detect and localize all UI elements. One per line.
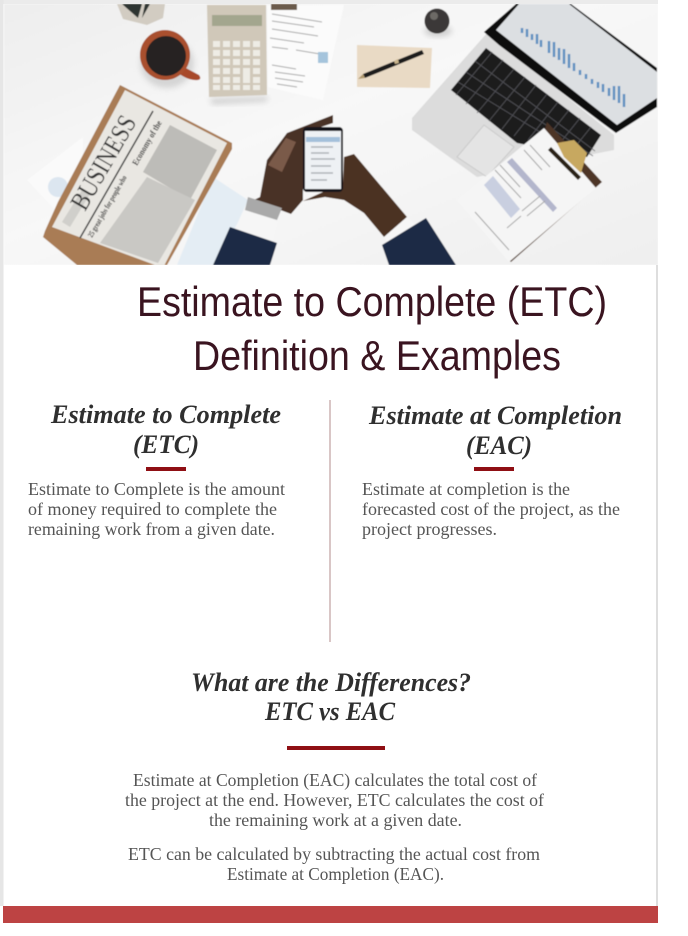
- icon: left hand: [213, 115, 333, 265]
- icon: handwritten note: [268, 4, 328, 88]
- text block: EAC definition: project progresses.: [362, 519, 497, 539]
- text: newspaper sub-headline: 25 great jobs for people who: [86, 174, 129, 239]
- text block: ETC definition: remaining work from a given date.: [28, 519, 275, 539]
- text block: ETC definition: [28, 479, 285, 539]
- icon: smartphone: [303, 127, 343, 192]
- icon: right hand: [303, 154, 456, 265]
- text block: ETC definition: of money required to complete the: [28, 499, 277, 519]
- accent bar: [474, 467, 514, 471]
- heading: estimate to complete: [50, 400, 281, 459]
- title: [137, 278, 607, 379]
- text block: differences explanation: [125, 770, 544, 830]
- heading: what are the differences: [191, 668, 471, 726]
- accent bar: [146, 467, 186, 471]
- panel: newspaper on leather folder: [27, 85, 248, 268]
- title: Estimate to Complete (ETC): [137, 278, 607, 325]
- panel: estimate to complete: [28, 400, 285, 539]
- text: newspaper headline: Economy of the: [130, 119, 164, 167]
- panel: laptop: [412, 4, 657, 177]
- icon: coffee mug: [140, 30, 200, 88]
- icon: plant pot: [117, 4, 165, 25]
- accent bar: [287, 746, 385, 750]
- text block: ETC calculation: [128, 844, 540, 884]
- panel: estimate at completion: [362, 401, 622, 539]
- footer bar: [3, 906, 658, 923]
- icon: pen on card: [357, 45, 432, 88]
- heading: estimate at completion: Estimate at Completion: [368, 401, 622, 430]
- text block: ETC definition: Estimate to Complete is the amount: [28, 479, 285, 499]
- text block: differences explanation: the remaining work at a given date.: [209, 810, 462, 830]
- panel: clipboard with invoice: [474, 122, 602, 262]
- heading: what are the differences: What are the Differences?: [191, 668, 471, 697]
- panel: differences: [125, 668, 544, 884]
- text: newspaper masthead: BUSINESS: [64, 110, 142, 215]
- icon: calculator: [207, 5, 268, 105]
- heading: estimate to complete: (ETC): [133, 430, 199, 459]
- text block: EAC definition: [362, 479, 620, 539]
- text block: ETC calculation: Estimate at Completion (EAC).: [227, 864, 444, 884]
- text block: differences explanation: the project at the end. However, ETC calculates the cost of: [125, 790, 544, 810]
- title: Definition & Examples: [193, 332, 561, 379]
- text block: EAC definition: forecasted cost of the project, as the: [362, 499, 620, 519]
- text block: differences explanation: Estimate at Completion (EAC) calculates the total cost of: [133, 770, 537, 790]
- icon: paperweight ball: [424, 8, 452, 37]
- heading: estimate at completion: [368, 401, 622, 460]
- heading: estimate at completion: (EAC): [466, 431, 532, 460]
- text block: EAC definition: Estimate at completion is the: [362, 479, 570, 499]
- heading: estimate to complete: Estimate to Complete: [50, 400, 281, 429]
- heading: what are the differences: ETC vs EAC: [264, 697, 396, 726]
- hero photo: desk with newspaper, calculator, phone and laptop: [4, 4, 658, 268]
- text block: ETC calculation: ETC can be calculated by subtracting the actual cost from: [128, 844, 540, 864]
